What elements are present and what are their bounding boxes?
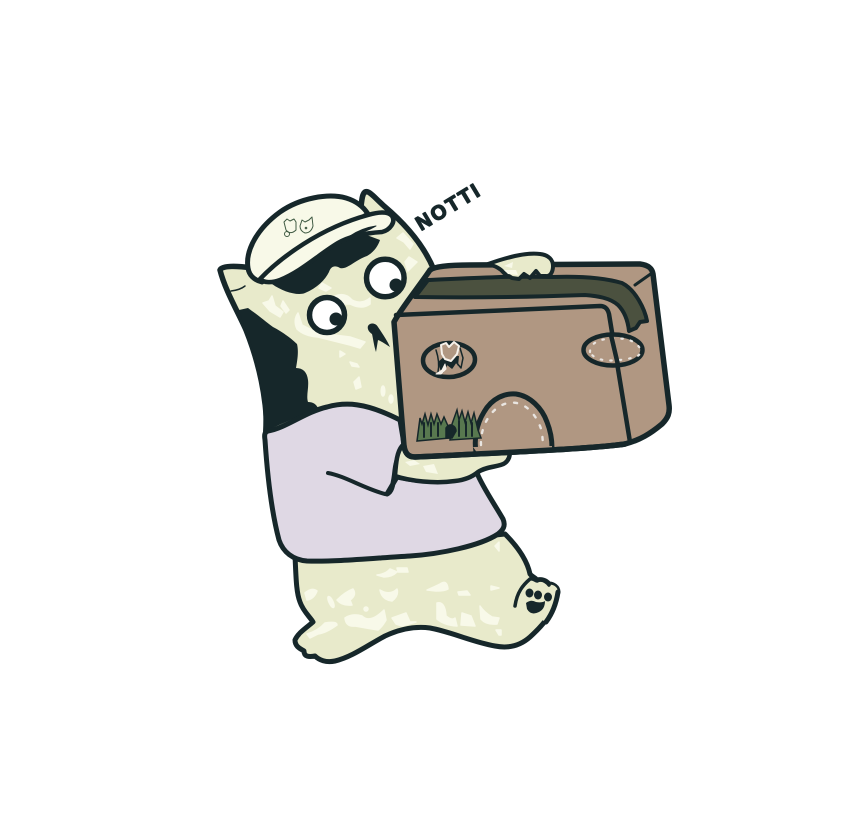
cap dome (248, 196, 368, 282)
eye: upper right (366, 259, 404, 297)
shadow under the brim (272, 225, 380, 294)
suitcase corner edge (635, 273, 652, 285)
cat head and ears (220, 192, 440, 430)
lower paw under suitcase (395, 440, 510, 482)
black fur patch (239, 308, 318, 432)
upper paw gripping suitcase (488, 254, 553, 279)
sleeve fold (328, 473, 394, 494)
suitcase body (394, 264, 669, 457)
suitcase right oval patch (584, 334, 642, 366)
baseball cap (248, 196, 393, 294)
inner ear detail (231, 286, 245, 291)
grass sticker (417, 410, 481, 441)
NOTTI label: NOTTI (412, 179, 486, 235)
suitcase (394, 264, 669, 457)
cap logo doodles (284, 217, 313, 236)
fur mottling on legs (305, 542, 501, 638)
suitcase left oval sticker (422, 342, 476, 378)
eye: lower left (310, 298, 344, 332)
suitcase bottom edge (404, 444, 625, 457)
suitcase front panel edge (396, 306, 630, 442)
fur mottling on face (263, 233, 417, 403)
suitcase arch patch (473, 394, 552, 454)
cap brim (260, 212, 393, 282)
cat shirt (265, 404, 504, 561)
suitcase strap (415, 277, 647, 331)
nose and mouth (368, 323, 390, 352)
cat legs and lower body (295, 534, 558, 662)
cat foot with paw pads (515, 579, 558, 622)
